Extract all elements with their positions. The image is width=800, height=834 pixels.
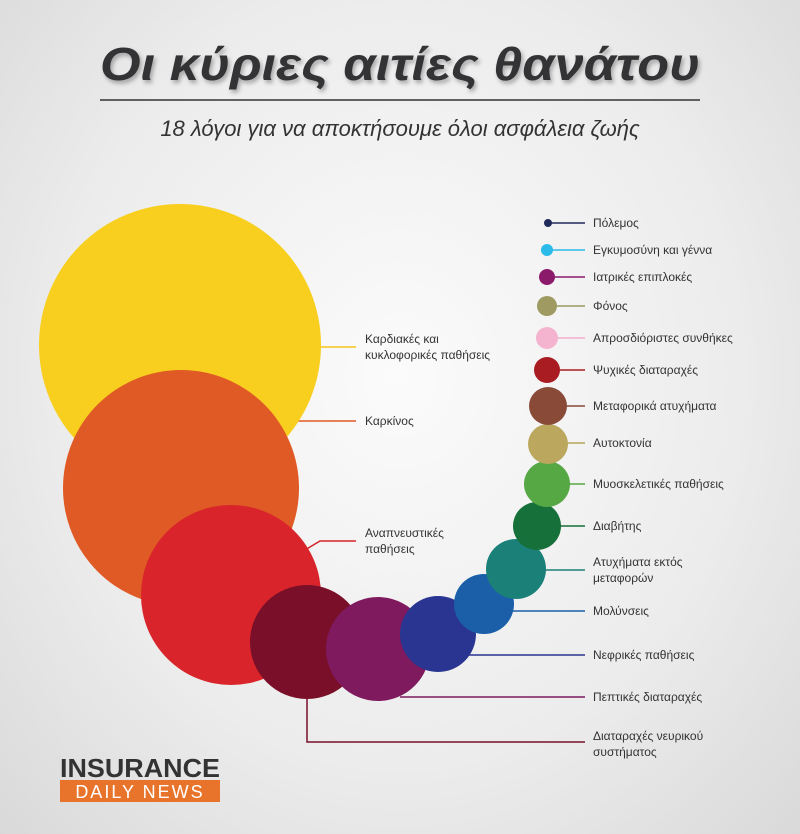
chart: bubbles: συστήματος: [593, 745, 657, 759]
title: Οι κύριες αιτίες θανάτου: [100, 38, 700, 90]
chart: bubbles: Πόλεμος: [593, 216, 639, 230]
chart: bubbles: Απροσδιόριστες συνθήκες: [593, 331, 733, 345]
chart: bubbles: παθήσεις: [365, 542, 415, 556]
chart: bubbles: Καρκίνος: [365, 414, 414, 428]
chart: bubbles: κυκλοφορικές παθήσεις: [365, 348, 490, 362]
circles: [39, 204, 321, 486]
chart: bubbles: Εγκυμοσύνη και γέννα: [593, 243, 712, 257]
chart: bubbles: Νεφρικές παθήσεις: [593, 648, 695, 662]
logo: INSURANCE: [60, 753, 220, 783]
chart: bubbles: Διαταραχές νευρικού: [593, 729, 703, 743]
chart: bubbles: Μεταφορικά ατυχήματα: [593, 399, 717, 413]
leader lines: [280, 223, 585, 742]
chart: bubbles: Πεπτικές διαταραχές: [593, 690, 702, 704]
logo: [60, 753, 220, 802]
labels: Καρδιακές και: [365, 332, 439, 346]
chart: bubbles: Μυοσκελετικές παθήσεις: [593, 477, 724, 491]
chart: bubbles: Αναπνευστικές: [365, 526, 444, 540]
chart: bubbles: Ιατρικές επιπλοκές: [593, 270, 692, 284]
chart: bubbles: Αυτοκτονία: [593, 436, 652, 450]
logo: DAILY NEWS: [75, 782, 205, 802]
subtitle: 18 λόγοι για να αποκτήσουμε όλοι ασφάλεια ζωής: [160, 116, 640, 141]
chart: bubbles: Διαβήτης: [593, 519, 642, 533]
chart: bubbles: [39, 204, 733, 759]
chart: bubbles: μεταφορών: [593, 571, 653, 585]
chart: bubbles: Ατυχήματα εκτός: [593, 555, 683, 569]
chart: bubbles: Μολύνσεις: [593, 604, 649, 618]
chart: bubbles: Ψυχικές διαταραχές: [593, 363, 698, 377]
chart: bubbles: Φόνος: [593, 299, 628, 313]
